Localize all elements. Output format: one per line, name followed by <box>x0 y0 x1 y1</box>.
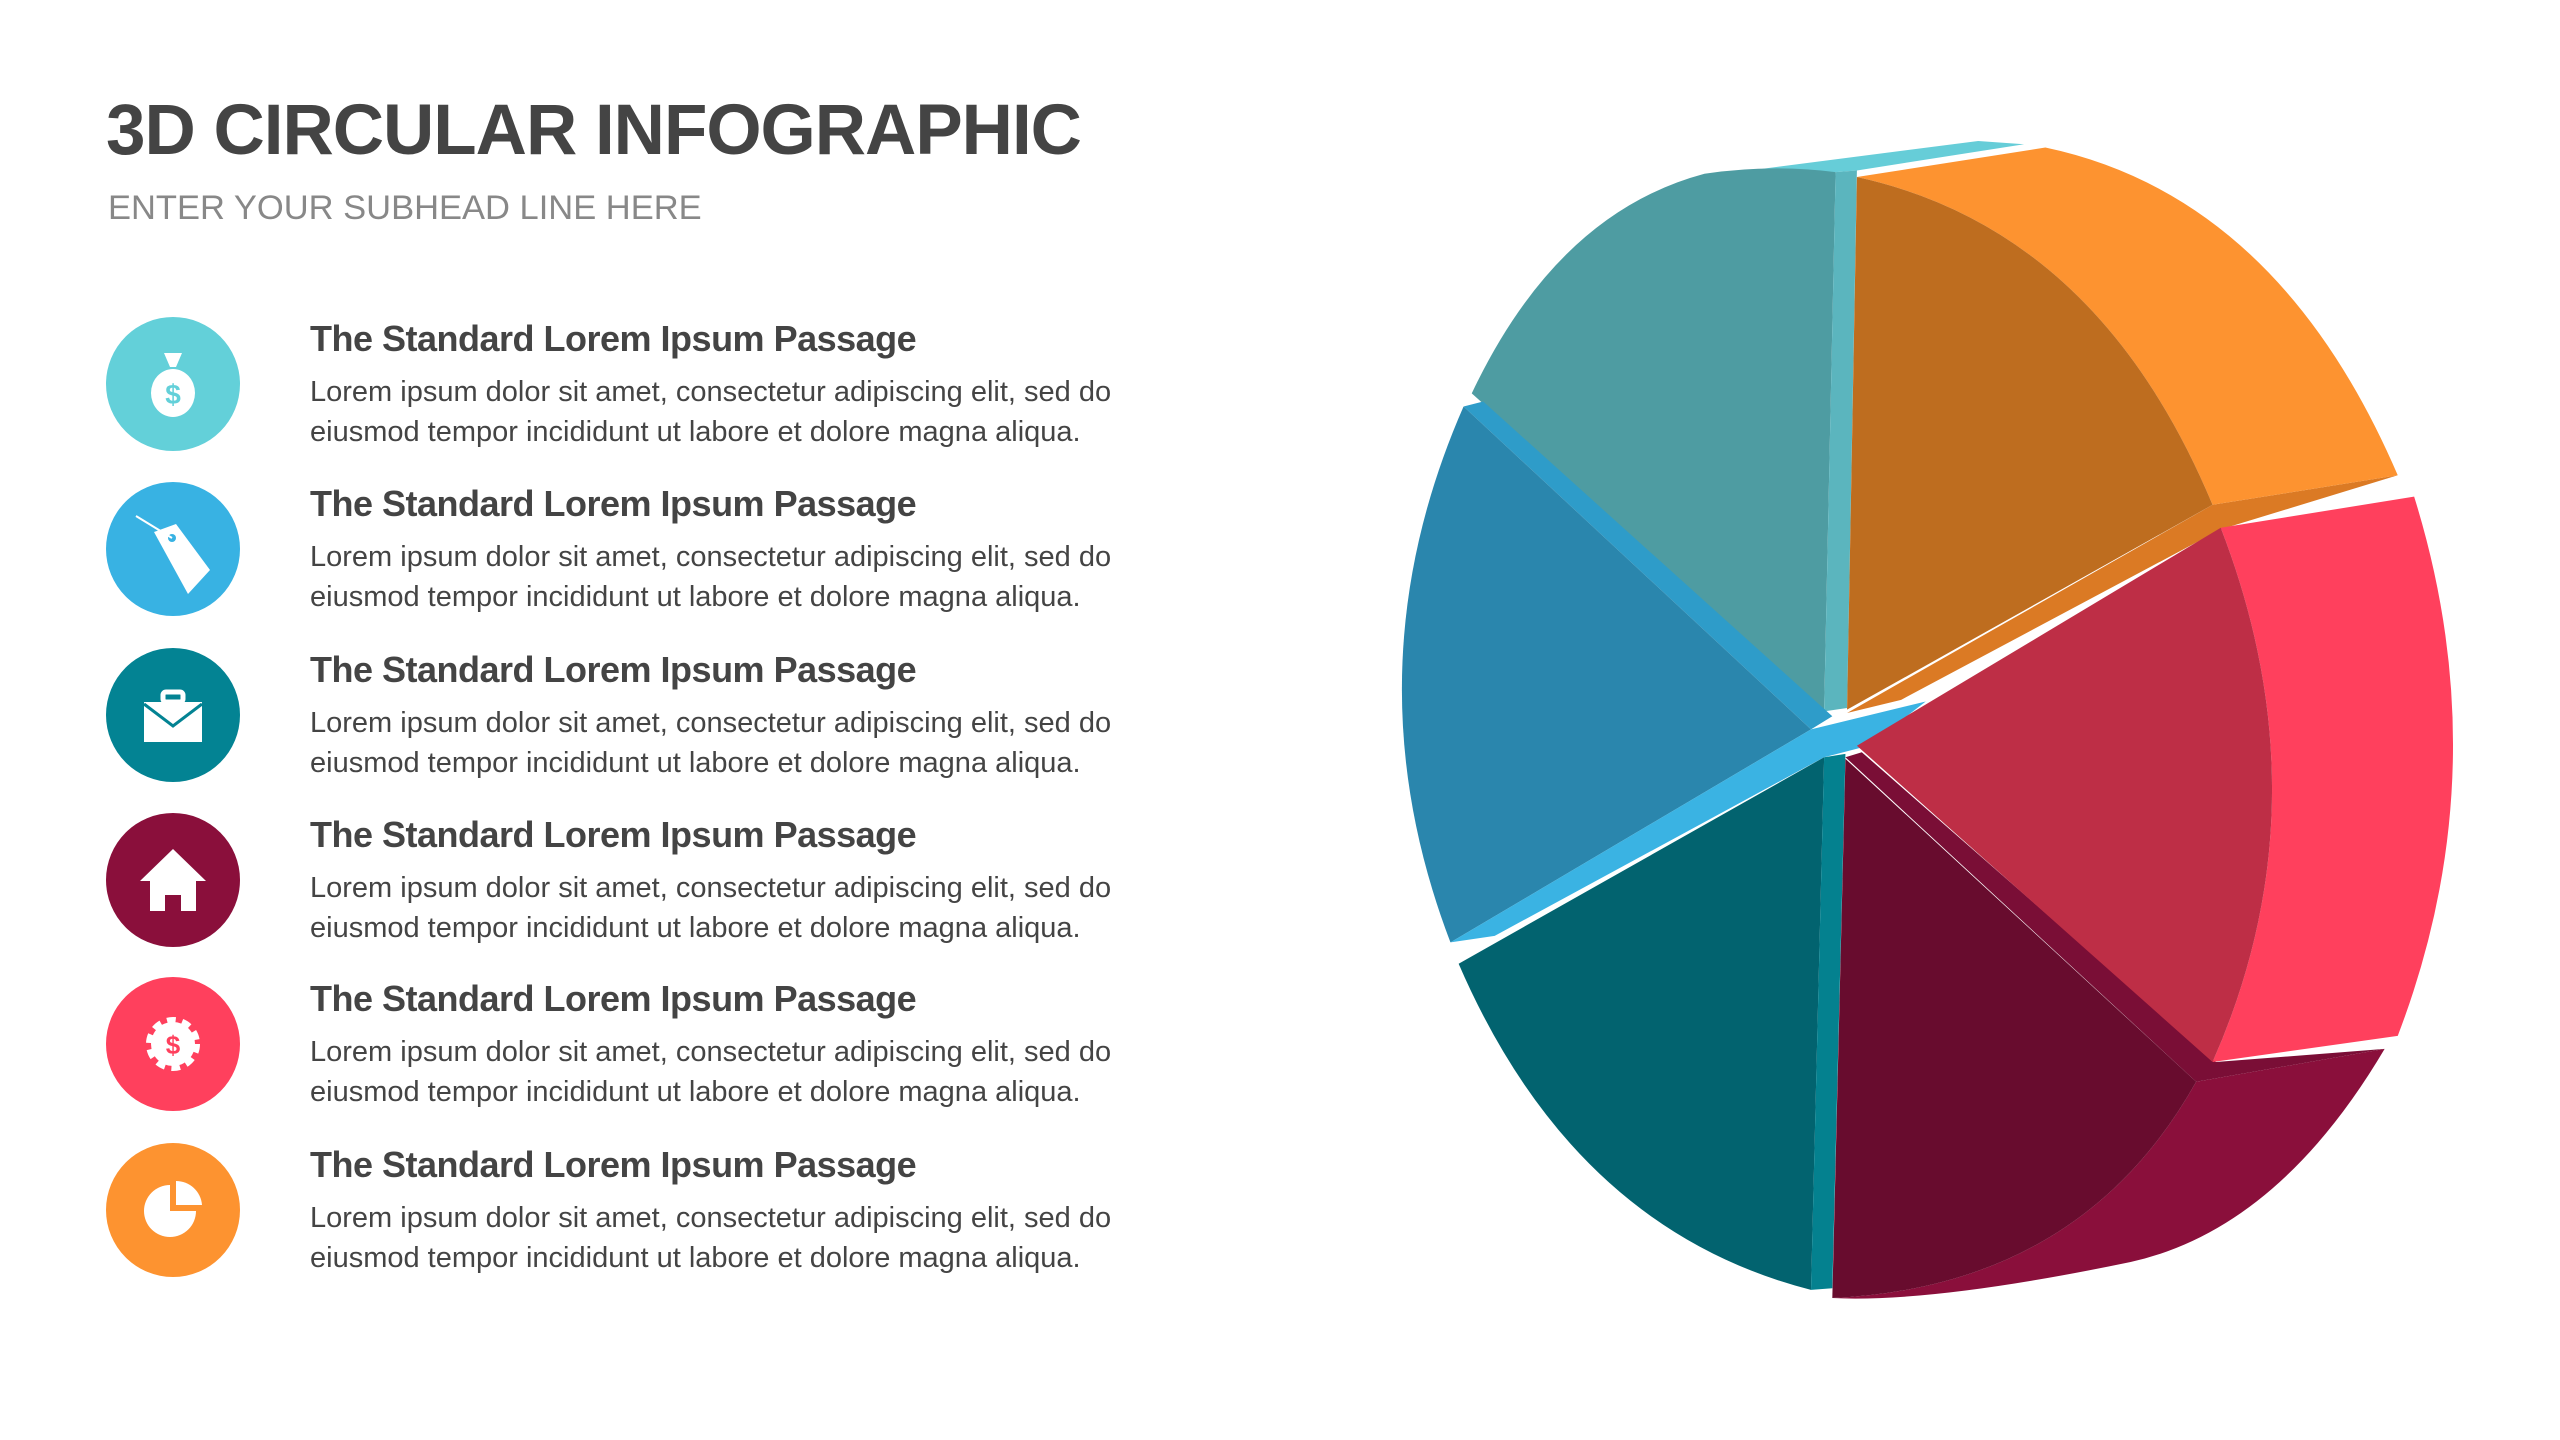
body 6: eiusmod tempor incididunt ut labore et dolore magna aliqua. <box>310 1242 1081 1274</box>
body 3: Lorem ipsum dolor sit amet, consectetur adipiscing elit, sed do <box>310 707 1111 739</box>
slice: maroon <box>1832 752 2385 1299</box>
heading 3: The Standard Lorem Ipsum Passage <box>310 649 916 690</box>
heading 1: The Standard Lorem Ipsum Passage <box>310 318 916 359</box>
heading 6: The Standard Lorem Ipsum Passage <box>310 1144 916 1185</box>
body 2 <box>310 541 1111 613</box>
heading 4: The Standard Lorem Ipsum Passage <box>310 814 916 855</box>
body 1: Lorem ipsum dolor sit amet, consectetur adipiscing elit, sed do <box>310 376 1111 408</box>
slice: blue <box>1402 402 1926 942</box>
item 2 <box>106 482 1111 616</box>
icon: pie chart <box>106 1143 240 1277</box>
body 2: Lorem ipsum dolor sit amet, consectetur adipiscing elit, sed do <box>310 541 1111 573</box>
body 4 <box>310 872 1111 944</box>
icon: money bag: $ <box>165 379 181 410</box>
heading 2: The Standard Lorem Ipsum Passage <box>310 483 916 524</box>
title: 3D CIRCULAR INFOGRAPHIC <box>106 91 1081 170</box>
heading 5: The Standard Lorem Ipsum Passage <box>310 978 916 1019</box>
slice: teal <box>1472 141 2024 711</box>
icon: money bag <box>106 317 240 451</box>
icon: gear dollar <box>106 977 240 1111</box>
slice: orange <box>1847 148 2398 713</box>
icon: briefcase <box>106 648 240 782</box>
body 3 <box>310 707 1111 779</box>
body 1 <box>310 376 1111 448</box>
item 6 <box>106 1143 1111 1277</box>
slice: dark teal <box>1459 754 1845 1290</box>
body 6: Lorem ipsum dolor sit amet, consectetur adipiscing elit, sed do <box>310 1202 1111 1234</box>
item 3 <box>106 648 1111 782</box>
body 5: eiusmod tempor incididunt ut labore et dolore magna aliqua. <box>310 1076 1081 1108</box>
body 5: Lorem ipsum dolor sit amet, consectetur adipiscing elit, sed do <box>310 1036 1111 1068</box>
icon: tag <box>106 482 240 616</box>
body 5 <box>310 1036 1111 1108</box>
body 6 <box>310 1202 1111 1274</box>
subhead: ENTER YOUR SUBHEAD LINE HERE <box>108 189 702 227</box>
slice: red <box>1857 497 2453 1062</box>
icon: gear dollar: $ <box>166 1030 181 1060</box>
item 5 <box>106 977 1111 1111</box>
body 3: eiusmod tempor incididunt ut labore et dolore magna aliqua. <box>310 747 1081 779</box>
item 1 <box>106 317 1111 451</box>
body 4: Lorem ipsum dolor sit amet, consectetur adipiscing elit, sed do <box>310 872 1111 904</box>
body 4: eiusmod tempor incididunt ut labore et dolore magna aliqua. <box>310 912 1081 944</box>
body 2: eiusmod tempor incididunt ut labore et dolore magna aliqua. <box>310 581 1081 613</box>
item 4 <box>106 813 1111 947</box>
icon: house <box>106 813 240 947</box>
body 1: eiusmod tempor incididunt ut labore et dolore magna aliqua. <box>310 416 1081 448</box>
